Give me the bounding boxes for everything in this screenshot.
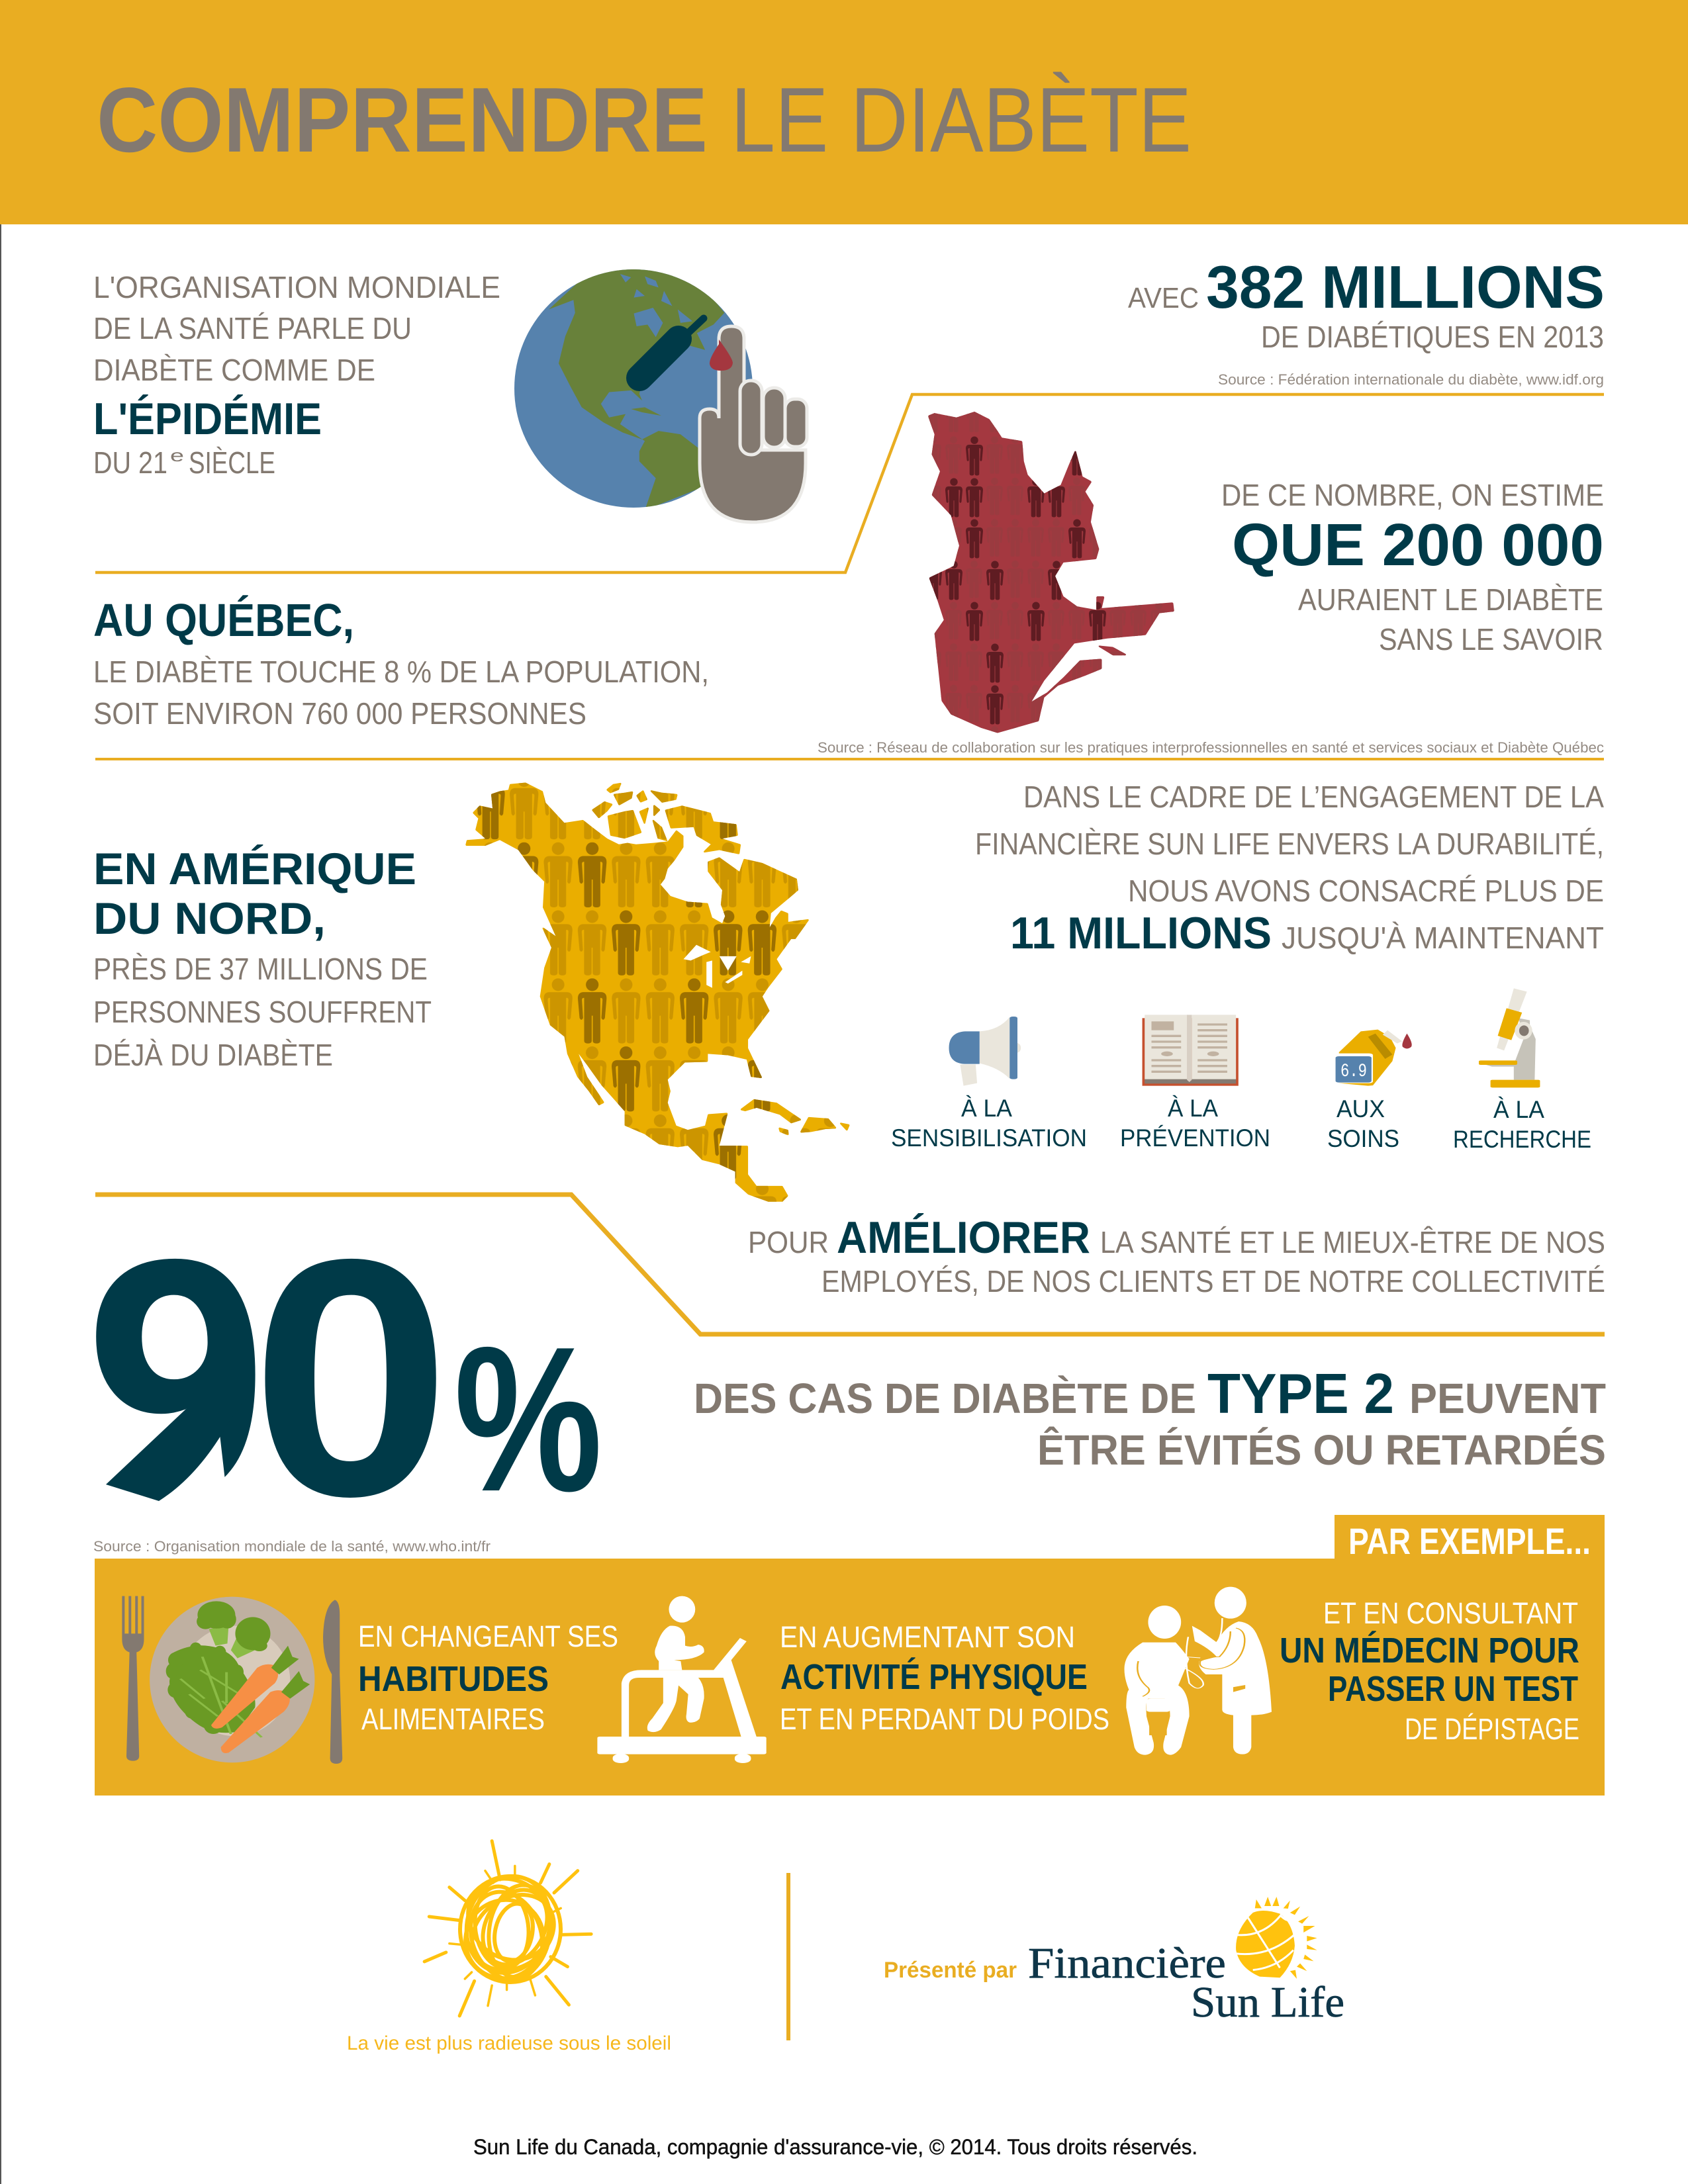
labels: funding areas: AUX bbox=[1336, 1095, 1385, 1122]
tab: par exemple: PAR EXEMPLE... bbox=[1348, 1520, 1591, 1562]
title: LE DIABÈTE bbox=[731, 69, 1192, 171]
header band bbox=[0, 0, 1688, 224]
title bbox=[97, 69, 1192, 171]
text block: 200 000: AURAIENT LE DIABÈTE bbox=[1298, 582, 1603, 617]
text: consulter un medecin bbox=[1280, 1596, 1579, 1746]
text block: 200 000: SANS LE SAVOIR bbox=[1379, 622, 1603, 657]
text: consulter un medecin: ET EN CONSULTANT bbox=[1323, 1596, 1578, 1630]
text block: OMS epidemic: DU 21 bbox=[93, 445, 167, 480]
text: activite physique bbox=[780, 1620, 1109, 1736]
map: Quebec bbox=[920, 407, 1178, 735]
text block: au Quebec: SOIT ENVIRON 760 000 PERSONNES bbox=[93, 696, 586, 731]
icon: book bbox=[1143, 1015, 1239, 1086]
text block: type 2: TYPE 2 bbox=[1207, 1363, 1394, 1426]
text: habitudes alimentaires: HABITUDES bbox=[358, 1659, 549, 1699]
text: activite physique: ET EN PERDANT DU POIDS bbox=[780, 1702, 1109, 1736]
text block: 200 000: DE CE NOMBRE, ON ESTIME bbox=[1221, 478, 1604, 512]
text: habitudes alimentaires: ALIMENTAIRES bbox=[361, 1702, 545, 1736]
text block: type 2: PEUVENT bbox=[1409, 1375, 1606, 1422]
text: consulter un medecin: PASSER UN TEST bbox=[1328, 1669, 1578, 1709]
tagline: La vie est plus radieuse sous le soleil bbox=[347, 2032, 671, 2054]
footer copyright: Sun Life du Canada, compagnie d'assurance-vie, © 2014. Tous droits réservés. bbox=[473, 2135, 1197, 2159]
logo: Financiere Sun Life: Financière bbox=[1028, 1939, 1226, 1987]
text: activite physique: EN AUGMENTANT SON bbox=[780, 1620, 1075, 1654]
text block: en Amerique du Nord: PERSONNES SOUFFRENT bbox=[93, 995, 432, 1029]
text block: en Amerique du Nord: EN AMÉRIQUE bbox=[93, 844, 416, 894]
text block: type 2: DES CAS DE DIABÈTE DE bbox=[694, 1375, 1196, 1422]
big number: 90%: % bbox=[454, 1304, 602, 1535]
icon: glucose meter bbox=[1334, 1030, 1412, 1086]
big number: 90% bbox=[73, 1189, 602, 1567]
title: COMPRENDRE bbox=[97, 69, 708, 171]
source: OMS: Source : Organisation mondiale de la santé, www.who.int/fr bbox=[93, 1538, 491, 1555]
text block: engagement Sun Life: DANS LE CADRE DE L’ENGAGEMENT DE LA bbox=[1023, 780, 1604, 814]
text block: au Quebec: AU QUÉBEC, bbox=[93, 594, 354, 646]
icon: doctor and patient bbox=[1125, 1587, 1272, 1755]
text block: au Quebec: LE DIABÈTE TOUCHE 8 % DE LA POPULATION, bbox=[93, 655, 709, 689]
icon: glucose meter: 6.9 bbox=[1340, 1062, 1367, 1082]
icon: lancet pen bbox=[639, 318, 704, 378]
map: North America bbox=[460, 774, 857, 1208]
text block: type 2 bbox=[694, 1363, 1606, 1474]
text block: ameliorer: AMÉLIORER bbox=[837, 1212, 1090, 1263]
text block: OMS epidemic bbox=[93, 270, 500, 480]
text block: en Amerique du Nord: PRÈS DE 37 MILLIONS DE bbox=[93, 952, 428, 986]
text block: ameliorer: LA SANTÉ ET LE MIEUX-ÊTRE DE NOS bbox=[1100, 1225, 1605, 1259]
text block: 200 000 bbox=[1221, 478, 1604, 657]
text block: OMS epidemic: SIÈCLE bbox=[189, 445, 275, 480]
text block: ameliorer bbox=[748, 1212, 1605, 1298]
text block: 382 millions: DE DIABÉTIQUES EN 2013 bbox=[1261, 320, 1604, 354]
text block: OMS epidemic: L'ÉPIDÉMIE bbox=[93, 394, 322, 444]
icon: megaphone bbox=[949, 1017, 1021, 1086]
text: consulter un medecin: DE DÉPISTAGE bbox=[1405, 1712, 1579, 1746]
left edge line bbox=[0, 224, 1, 2184]
text block: engagement Sun Life: JUSQU'À MAINTENANT bbox=[1282, 921, 1604, 955]
text block: engagement Sun Life: 11 MILLIONS bbox=[1010, 908, 1272, 958]
labels: funding areas: À LA bbox=[961, 1095, 1012, 1122]
text block: OMS epidemic: e bbox=[170, 445, 184, 465]
logo: Financiere Sun Life bbox=[1028, 1897, 1344, 2026]
labels: funding areas: SOINS bbox=[1327, 1125, 1399, 1152]
presented by: Présenté par bbox=[884, 1958, 1017, 1983]
labels: funding areas: À LA bbox=[1168, 1095, 1218, 1122]
big number: 90%: 0 bbox=[251, 1189, 451, 1567]
text block: 382 millions: 382 MILLIONS bbox=[1206, 254, 1605, 321]
source: Quebec: Source : Réseau de collaboration sur les pratiques interprofessionnelles en santé et services sociaux et Diabète Québec bbox=[818, 739, 1604, 756]
text: habitudes alimentaires: EN CHANGEANT SES bbox=[358, 1619, 618, 1653]
labels: funding areas: SENSIBILISATION bbox=[891, 1124, 1087, 1152]
text block: ameliorer: POUR bbox=[748, 1225, 829, 1259]
text block: OMS epidemic: L'ORGANISATION MONDIALE bbox=[93, 270, 500, 304]
icon: hand with blood drop bbox=[700, 326, 807, 522]
text block: type 2: ÊTRE ÉVITÉS OU RETARDÉS bbox=[1037, 1426, 1606, 1474]
text block: engagement Sun Life: FINANCIÈRE SUN LIFE ENVERS LA DURABILITÉ, bbox=[975, 827, 1604, 861]
text block: OMS epidemic: DE LA SANTÉ PARLE DU bbox=[93, 311, 412, 345]
logo: radiant sun bbox=[424, 1841, 591, 2016]
text block: 382 millions bbox=[1128, 254, 1605, 354]
text: consulter un medecin: UN MÉDECIN POUR bbox=[1280, 1631, 1579, 1670]
icon: treadmill bbox=[597, 1596, 767, 1763]
panel: examples bbox=[95, 1559, 1605, 1796]
big number: 90%: 9 bbox=[85, 1189, 267, 1567]
text block: en Amerique du Nord bbox=[93, 844, 432, 1072]
logo: Financiere Sun Life: Sun Life bbox=[1191, 1978, 1344, 2026]
text block: 200 000: QUE 200 000 bbox=[1232, 512, 1604, 578]
text block: engagement Sun Life bbox=[975, 780, 1604, 958]
text block: OMS epidemic: DIABÈTE COMME DE bbox=[93, 353, 375, 387]
labels: funding areas: RECHERCHE bbox=[1453, 1126, 1591, 1153]
source: IDF: Source : Fédération internationale du diabète, www.idf.org bbox=[1218, 371, 1604, 388]
text block: au Quebec bbox=[93, 594, 709, 731]
labels: funding areas: À LA bbox=[1493, 1096, 1544, 1123]
labels: funding areas bbox=[891, 1095, 1591, 1153]
text block: engagement Sun Life: NOUS AVONS CONSACRÉ PLUS DE bbox=[1128, 874, 1604, 908]
text block: en Amerique du Nord: DU NORD, bbox=[93, 893, 326, 944]
icon: microscope bbox=[1479, 988, 1540, 1087]
text block: 382 millions: AVEC bbox=[1128, 282, 1199, 314]
icon: plate with cutlery bbox=[122, 1596, 342, 1764]
labels: funding areas: PRÉVENTION bbox=[1120, 1124, 1270, 1152]
text: activite physique: ACTIVITÉ PHYSIQUE bbox=[780, 1657, 1088, 1697]
text block: ameliorer: EMPLOYÉS, DE NOS CLIENTS ET DE NOTRE COLLECTIVITÉ bbox=[821, 1264, 1605, 1298]
icon: globe bbox=[514, 259, 753, 510]
text: habitudes alimentaires bbox=[358, 1619, 618, 1736]
text block: en Amerique du Nord: DÉJÀ DU DIABÈTE bbox=[93, 1038, 333, 1072]
